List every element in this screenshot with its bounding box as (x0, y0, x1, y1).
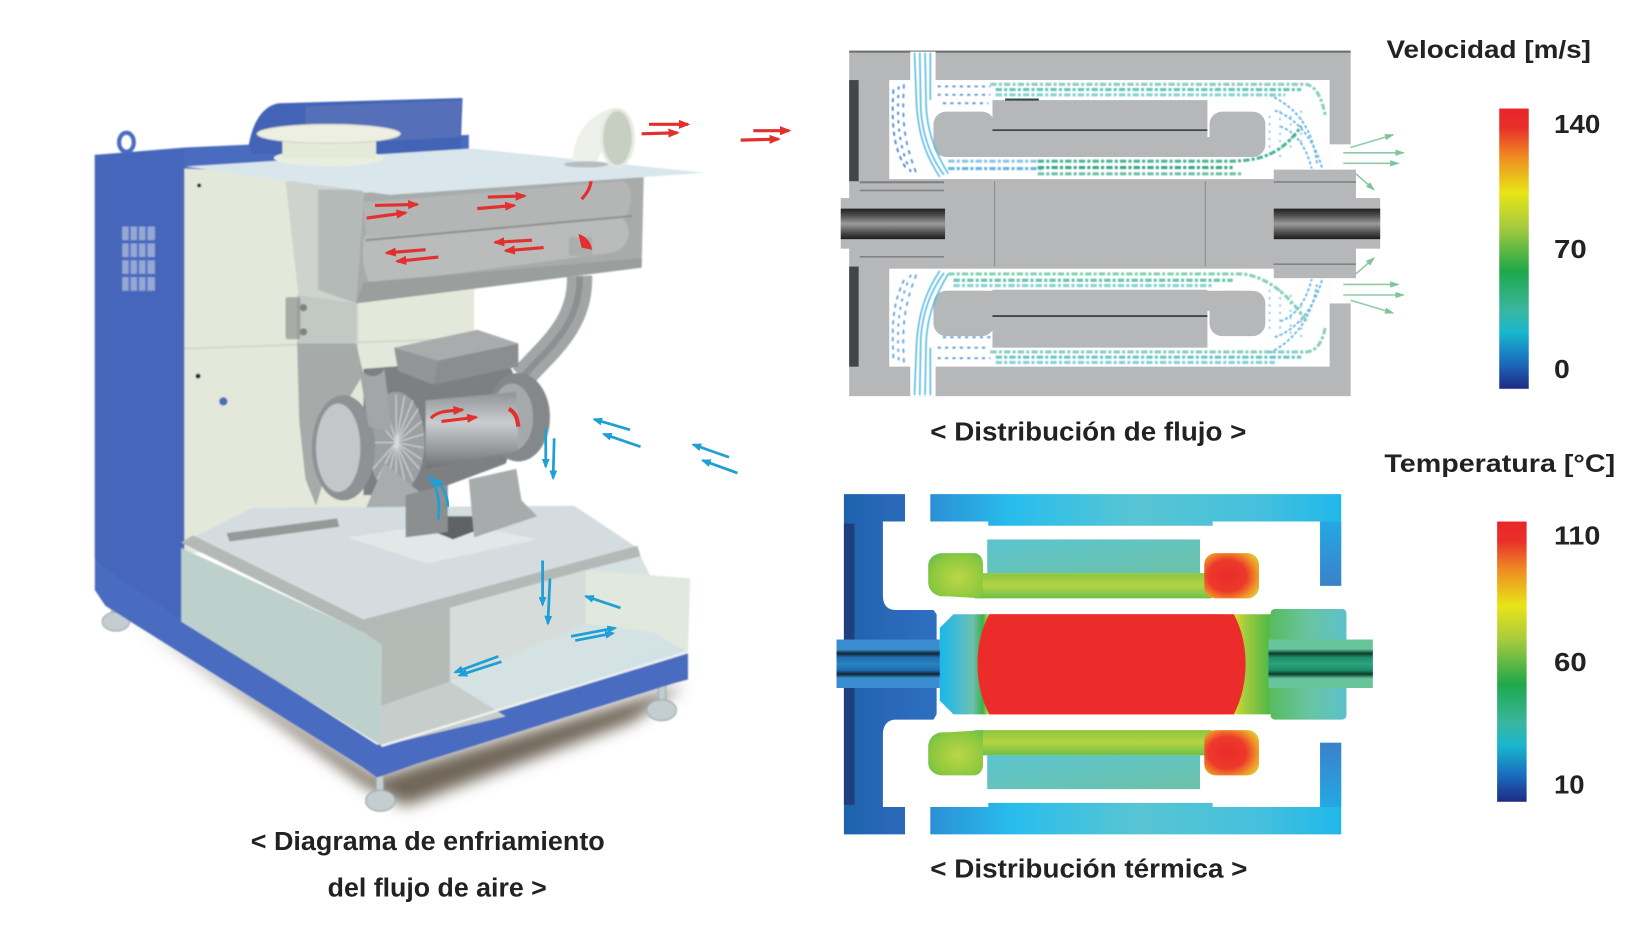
heading: velocity legend: Velocidad [m/s] (1386, 36, 1591, 64)
color bar: temperature (1497, 522, 1527, 802)
heading: temperature legend: Temperatura [°C] (1384, 450, 1615, 478)
vent grille (122, 227, 155, 291)
velocity scale values (1554, 109, 1600, 384)
velocity scale values: 0 (1554, 354, 1570, 384)
blue arrows: cool air flow (430, 419, 738, 675)
upper heat exchanger box (356, 177, 644, 303)
temperature scale values: 10 (1554, 769, 1585, 799)
caption: flow distribution: < Distribución de flujo > (930, 416, 1246, 446)
color bar: velocity (1499, 109, 1529, 389)
velocity scale values: 70 (1554, 234, 1587, 264)
stator laminations (987, 539, 1200, 573)
flow vectors: vertical inlet jets (914, 53, 948, 395)
windings (975, 573, 1212, 598)
motor supports (469, 469, 537, 537)
clamp (286, 297, 307, 339)
panel: flow distribution cross-section (841, 51, 1403, 396)
temperature scale values (1554, 521, 1600, 799)
flow vectors: side eddies (893, 84, 1322, 362)
motor: dark backing (363, 358, 527, 495)
top blue hood (249, 98, 463, 154)
motor: cylinder body (426, 392, 518, 469)
velocity scale values: 140 (1554, 109, 1600, 139)
base platform (193, 506, 637, 622)
red fan-shaped arrow (578, 234, 592, 250)
caption: air cooling diagram: del flujo de aire > (328, 873, 547, 903)
rotor with hot core (940, 614, 1271, 714)
floor shadow (132, 616, 685, 806)
temperature scale values: 60 (1554, 647, 1587, 677)
panel: thermal distribution cross-section (837, 494, 1373, 834)
upper stator and coil ends (933, 100, 1265, 348)
temperature scale values: 110 (1554, 521, 1600, 551)
housing and cavities (849, 52, 1351, 396)
blue cabinet shell (95, 135, 688, 778)
motor: front ring (312, 395, 375, 500)
caption: thermal distribution: < Distribución térmica > (930, 854, 1247, 884)
motor: rear ring (487, 373, 550, 461)
motor: bladed disk (368, 392, 425, 493)
caption: air cooling diagram: < Diagrama de enfriamiento (251, 826, 605, 856)
flexible hose (523, 276, 580, 377)
machine: air-flow cooling cabinet (95, 98, 789, 811)
lower bay: walls and floor (362, 556, 688, 746)
platform rim (181, 535, 641, 632)
caption: air cooling diagram (251, 826, 605, 903)
flow vectors: air-gap streams (948, 84, 1325, 362)
housing top and bottom (930, 494, 1341, 586)
shaft ends (837, 640, 940, 688)
red arrows: hot air flow (367, 124, 789, 427)
shaft dark sections (841, 209, 945, 239)
left end shield (844, 494, 937, 834)
top plate (185, 149, 705, 195)
cream inner wall (184, 169, 474, 553)
right bearing block (1271, 609, 1346, 720)
rotor and shaft (860, 181, 1277, 267)
inlet flange (274, 150, 384, 166)
feet (102, 603, 676, 811)
outlet flow arrows (1343, 135, 1403, 313)
outlet pipe elbow (572, 107, 632, 161)
motor: junction box (394, 330, 518, 360)
lifting eye bolt (119, 133, 134, 152)
vertical duct column (286, 181, 358, 395)
